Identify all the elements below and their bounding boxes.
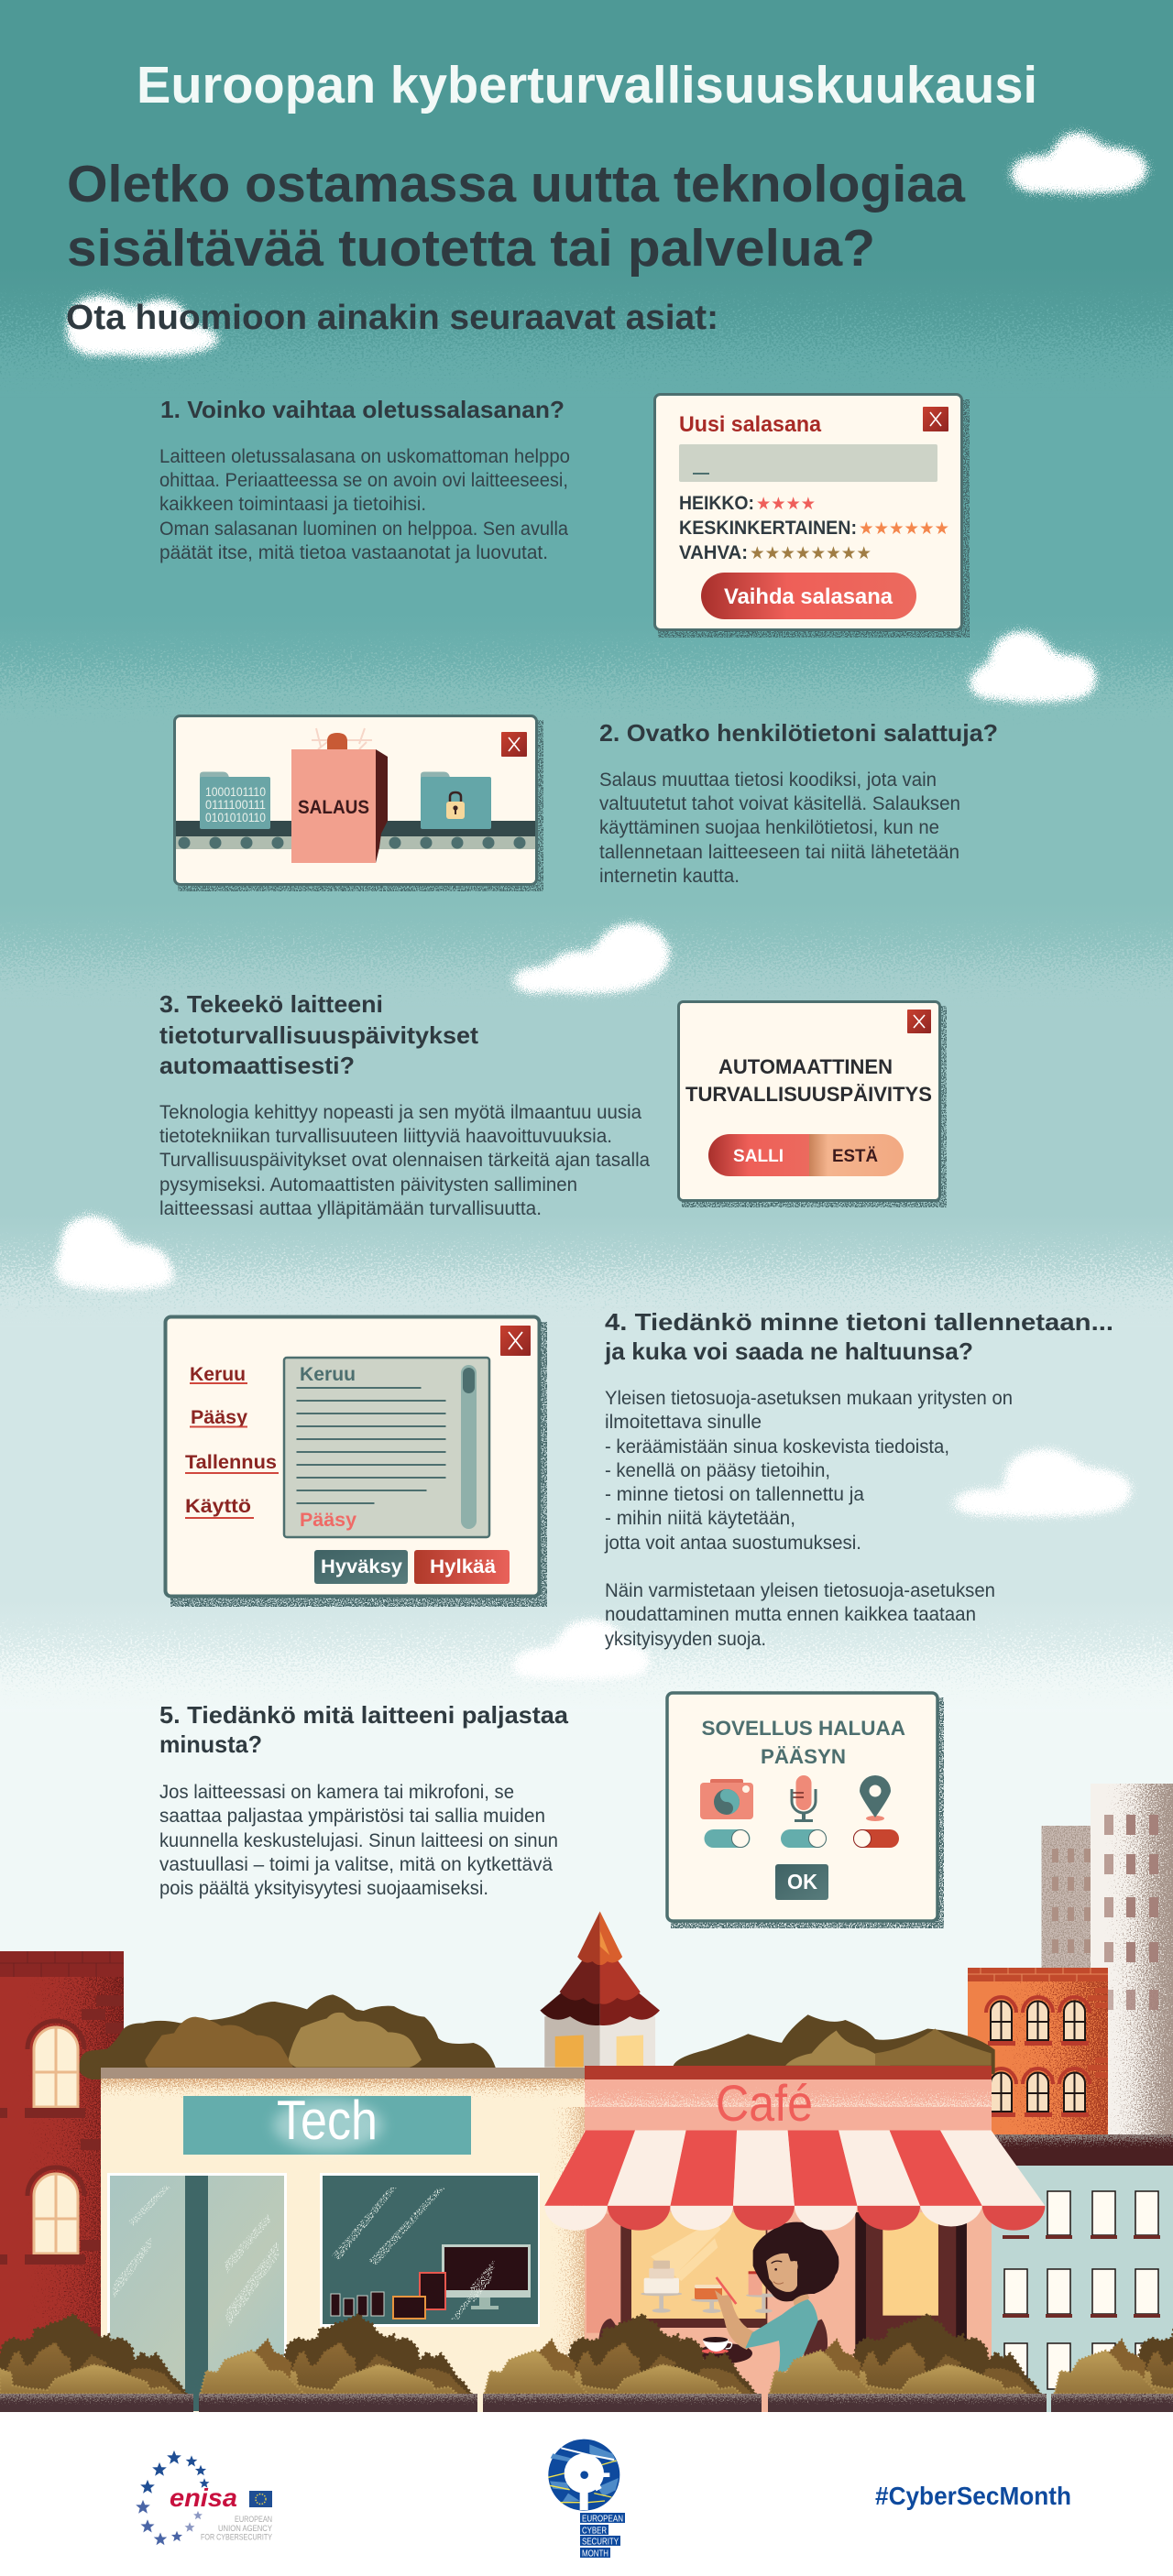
icon: close button [500, 1326, 531, 1356]
tab labels: Tallennus [185, 1452, 277, 1473]
section 3 text: pysymiseksi. Automaattisten päivitysten salliminen [159, 1174, 577, 1195]
section 5 text: saattaa paljastaa ympäristösi tai sallia muiden [159, 1806, 545, 1827]
panel: new password dialog: Vaihda salasana [724, 584, 893, 609]
panel: new password dialog: VAHVA: [679, 542, 748, 563]
panel: new password dialog: ★★★★★★★★ [750, 543, 872, 563]
section 5 text [159, 1701, 569, 1899]
panel: encryption conveyor [174, 716, 543, 891]
section 5 text: kuunnella keskustelujasi. Sinun laitteesi on sinun [159, 1830, 558, 1851]
section 4 text: - keräämistään sinua koskevista tiedoista, [605, 1436, 949, 1457]
toggle: microphone [781, 1829, 827, 1848]
tech sign [183, 2090, 471, 2155]
cafe door [855, 2212, 967, 2350]
tech shop [101, 2068, 585, 2412]
encryption machine: SALAUS [298, 797, 369, 818]
cafe [544, 2066, 1045, 2412]
section 5 text: pois päältä yksityisyytesi suojaamiseksi. [159, 1878, 488, 1899]
devices [331, 2244, 531, 2319]
section 3 text: tietotekniikan turvallisuuteen liittyviä haavoittuvuuksia. [159, 1126, 612, 1147]
tab labels: Keruu [190, 1364, 246, 1385]
icon: binary folder: 1000101110 [205, 785, 266, 799]
logo: european cyber security month: SECURITY [582, 2536, 619, 2547]
glass door [107, 2173, 287, 2411]
section 2 text: 2. Ovatko henkilötietoni salattuja? [599, 719, 998, 747]
subheading: Ota huomioon ainakin seuraavat asiat: [66, 299, 718, 337]
coffee cup [701, 2337, 732, 2353]
section 1 text: kaikkeen toimintaasi ja tietoihisi. [159, 494, 426, 515]
section 1 text: ohittaa. Periaatteessa se on avoin ovi laitteeseesi, [159, 470, 568, 491]
conveyor belt [176, 821, 535, 849]
tech sign: Tech [277, 2090, 378, 2151]
icon: locked folder [421, 771, 491, 829]
panel: app permissions dialog: PÄÄSYN [761, 1745, 846, 1768]
hill behind cafe [674, 2014, 995, 2074]
distant buildings [1041, 1784, 1173, 2141]
main heading: Oletko ostamassa uutta teknologiaa [67, 155, 966, 213]
section 1 text: Oman salasanan luominen on helppoa. Sen avulla [159, 518, 568, 540]
section 3 text [159, 990, 650, 1219]
section 2 text: tallennetaan laitteeseen tai niitä lähetetään [599, 842, 959, 863]
main heading [67, 155, 966, 278]
section 2 text [599, 719, 998, 887]
panel: automatic updates dialog: AUTOMAATTINEN [718, 1055, 893, 1078]
logo: enisa: enisa [170, 2483, 237, 2512]
ok button [775, 1864, 828, 1900]
logo: enisa: UNION AGENCY [218, 2524, 272, 2533]
section 5 text: Jos laitteessasi on kamera tai mikrofoni, se [159, 1782, 514, 1803]
section 4 text: 4. Tiedänkö minne tietoni tallennetaan... [605, 1308, 1113, 1336]
toggle: camera [704, 1829, 750, 1848]
logo: european cyber security month [548, 2440, 625, 2560]
icon: camera [700, 1779, 753, 1819]
section 4 text: noudattaminen mutta ennen kaikkea taataan [605, 1604, 976, 1625]
icon: microphone [792, 1775, 816, 1822]
hedges [0, 2314, 1173, 2394]
panel: new password dialog [654, 394, 970, 638]
hills and tower [540, 1911, 995, 2074]
section 4 text: yksityisyyden suoja. [605, 1629, 766, 1650]
section 5 text: vastuullasi – toimi ja valitse, mitä on kytkettävä [159, 1854, 553, 1875]
section 1 text: 1. Voinko vaihtaa oletussalasanan? [160, 396, 565, 423]
logo: enisa: EUROPEAN [235, 2515, 272, 2524]
pale blue building [991, 2134, 1173, 2413]
hashtag: #CyberSecMonth [875, 2482, 1071, 2510]
toggle: allow or block [708, 1134, 904, 1176]
main heading: sisältävää tuotetta tai palvelua? [67, 219, 875, 278]
panel: new password dialog: KESKINKERTAINEN: [679, 518, 857, 539]
section 4 text: Yleisen tietosuoja-asetuksen mukaan yritysten on [605, 1388, 1013, 1409]
panel: automatic updates dialog [678, 1002, 947, 1207]
section 5 text: 5. Tiedänkö mitä laitteeni paljastaa [159, 1701, 569, 1729]
orange brick building [968, 1968, 1108, 2142]
section 3 text: tietoturvallisuuspäivitykset [159, 1021, 478, 1049]
logo: european cyber security month: EUROPEAN [582, 2514, 623, 2525]
section 2 text: käyttäminen suojaa henkilötietosi, kun ne [599, 817, 939, 838]
section 4 text: - minne tietosi on tallennettu ja [605, 1484, 864, 1505]
icon: eu flag [249, 2491, 272, 2507]
document pane: Pääsy [300, 1510, 356, 1531]
accept button [314, 1550, 408, 1584]
section 4 text: ilmoitettava sinulle [605, 1412, 762, 1433]
toggle: allow or block: ESTÄ [832, 1147, 878, 1166]
logo: enisa [136, 2450, 272, 2545]
section 2 text: internetin kautta. [599, 866, 740, 887]
cafe sign: Café [716, 2074, 813, 2132]
section 4 text: - kenellä on pääsy tietoihin, [605, 1460, 830, 1481]
toggle: location [853, 1829, 899, 1848]
section 3 text: Teknologia kehittyy nopeasti ja sen myötä ilmaantuu uusia [159, 1102, 641, 1123]
title: Euroopan kyberturvallisuuskuukausi [137, 56, 1037, 115]
icon: close button [907, 1010, 931, 1033]
shop window with devices [320, 2173, 540, 2327]
section 3 text: automaattisesti? [159, 1052, 355, 1079]
toggle: allow or block: SALLI [733, 1147, 784, 1166]
encryption machine [291, 728, 388, 863]
tab labels: Käyttö [185, 1496, 251, 1517]
icon: location pin [860, 1775, 891, 1821]
panel: automatic updates dialog: TURVALLISUUSPÄIVITYS [685, 1083, 932, 1106]
section 3 text: 3. Tekeekö laitteeni [159, 990, 383, 1018]
chairs and table [598, 2319, 828, 2363]
logo: european cyber security month: MONTH [582, 2549, 608, 2560]
panel: new password dialog: ★★★★ [756, 494, 816, 514]
section 2 text: valtuutetut tahot voivat käsitellä. Salauksen [599, 793, 960, 814]
section 4 text [604, 1308, 1113, 1650]
section 5 text: minusta? [159, 1730, 262, 1758]
planters [0, 2394, 1173, 2412]
tab labels [185, 1364, 279, 1519]
panel: app permissions dialog: SOVELLUS HALUAA [702, 1717, 905, 1740]
section 1 text: päätät itse, mitä tietoa vastaanotat ja luovutat. [159, 542, 548, 563]
panel: new password dialog: ★★★★★★ [859, 518, 949, 539]
reject button [414, 1550, 510, 1584]
reject button: Hylkää [430, 1556, 496, 1577]
icon: binary folder: 0111100111 [205, 798, 266, 812]
icon: binary folder: 0101010110 [205, 811, 266, 824]
accept button: Hyväksy [321, 1556, 402, 1577]
church tower [540, 1911, 660, 2068]
tab labels: Pääsy [191, 1407, 247, 1428]
logo: enisa: FOR CYBERSECURITY [201, 2532, 272, 2541]
section 1 text [159, 396, 570, 563]
logo: european cyber security month: CYBER [582, 2525, 607, 2536]
icon: close button [501, 732, 527, 757]
panel: app permissions dialog [667, 1693, 944, 1928]
ok button: OK [787, 1870, 817, 1894]
window with cakes [620, 2212, 780, 2328]
woman with phone [715, 2222, 839, 2377]
panel: new password dialog: Uusi salasana [679, 412, 822, 437]
section 2 text: Salaus muuttaa tietosi koodiksi, jota vain [599, 770, 937, 791]
icon: binary folder [200, 771, 270, 829]
section 3 text: laitteessasi auttaa ylläpitämään turvallisuutta. [159, 1198, 542, 1219]
hill behind tech shop [79, 1994, 496, 2079]
panel: data use dialog [165, 1317, 547, 1607]
section 4 text: jotta voit antaa suostumuksesi. [604, 1533, 861, 1554]
document pane [284, 1358, 489, 1537]
section 4 text: Näin varmistetaan yleisen tietosuoja-asetuksen [605, 1580, 995, 1601]
section 4 text: - mihin niitä käytetään, [605, 1508, 795, 1529]
section 4 text: ja kuka voi saada ne haltuunsa? [604, 1337, 973, 1365]
document pane: Keruu [300, 1364, 356, 1385]
section 1 text: Laitteen oletussalasana on uskomattoman helppo [159, 446, 570, 467]
striped awning [544, 2131, 1045, 2231]
red brick building [0, 1951, 124, 2391]
footer background [0, 2412, 1173, 2576]
section 3 text: Turvallisuuspäivitykset ovat olennaisen tärkeitä ajan tasalla [159, 1150, 650, 1171]
panel: new password dialog: HEIKKO: [679, 493, 754, 514]
clouds [54, 132, 1148, 1679]
cafe scene [586, 2212, 967, 2377]
